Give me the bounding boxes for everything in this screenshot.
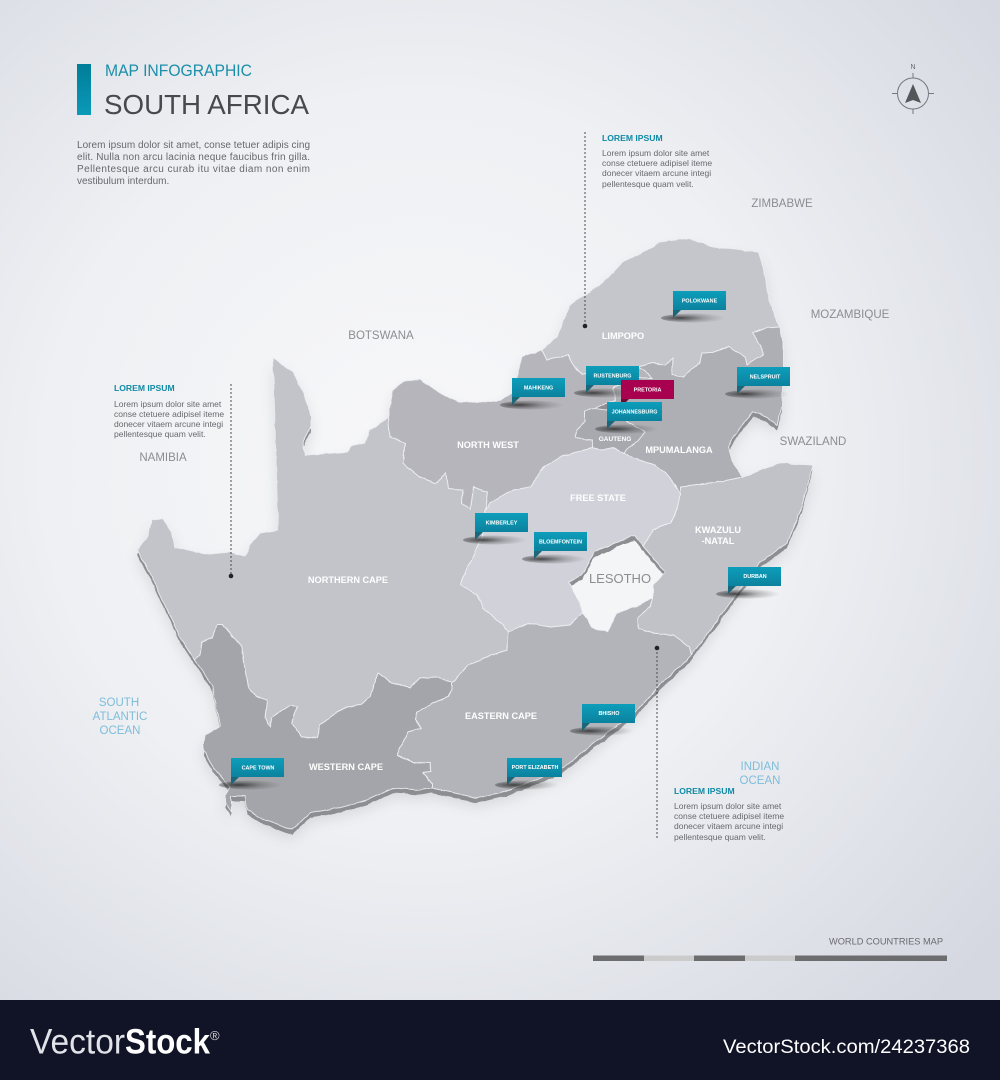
city flag: Rustenburg: RUSTENBURG bbox=[593, 374, 632, 380]
soft map glow bbox=[137, 247, 813, 839]
icon: compass: N bbox=[910, 64, 916, 71]
ocean labels: ATLANTIC bbox=[93, 711, 147, 723]
ocean labels bbox=[93, 697, 780, 787]
province: North West bbox=[388, 350, 653, 510]
callout: bottom right: Lorem ipsum dolor site amet bbox=[674, 801, 782, 811]
city flag: Kimberley bbox=[463, 513, 528, 544]
ocean labels: OCEAN bbox=[100, 725, 140, 737]
ocean labels: OCEAN bbox=[740, 775, 780, 787]
province labels: GAUTENG bbox=[599, 436, 631, 443]
city flag: Johannesburg: JOHANNESBURG bbox=[612, 410, 657, 416]
neighbouring country labels: LESOTHO bbox=[589, 571, 651, 586]
callout: top: Lorem ipsum dolor site amet bbox=[602, 148, 710, 158]
map extrusion edge bbox=[137, 243, 813, 835]
province: Northern Cape bbox=[137, 357, 508, 738]
province labels bbox=[308, 331, 741, 772]
callout: top: donecer vitaem arcune integi bbox=[602, 168, 711, 178]
footer logo: Stock bbox=[125, 1022, 210, 1062]
province: Free State bbox=[460, 447, 680, 632]
callout: left: LOREM IPSUM bbox=[114, 383, 175, 393]
ocean labels: INDIAN bbox=[741, 761, 779, 773]
intro paragraph: elit. Nulla non arcu lacinia neque faucibus frin gilla. bbox=[77, 152, 310, 163]
city flag: Bhisho: BHISHO bbox=[599, 711, 619, 717]
footer url: VectorStock.com/24237368 bbox=[723, 1036, 970, 1058]
province labels: -NATAL bbox=[702, 536, 735, 546]
province: Gauteng bbox=[575, 408, 645, 453]
city flag: Pretoria bbox=[621, 380, 674, 407]
title accent bar bbox=[77, 64, 91, 115]
city flag: Polokwane: POLOKWANE bbox=[682, 298, 718, 304]
callout: left bbox=[114, 383, 233, 578]
city flag: Port Elizabeth bbox=[495, 758, 562, 790]
neighbouring country labels: NAMIBIA bbox=[139, 452, 187, 464]
intro paragraph: vestibulum interdum. bbox=[77, 176, 169, 187]
province: KwaZulu-Natal bbox=[637, 463, 813, 655]
scale bar bbox=[593, 936, 947, 961]
province labels: LIMPOPO bbox=[602, 331, 644, 341]
intro paragraph: Lorem ipsum dolor sit amet, conse tetuer adipis cing bbox=[77, 140, 310, 151]
city flag: Bloemfontein bbox=[522, 532, 587, 564]
Lesotho bbox=[568, 536, 665, 632]
callout: left: donecer vitaem arcune integi bbox=[114, 419, 223, 429]
city flag: Cape Town bbox=[219, 758, 284, 790]
province labels: EASTERN CAPE bbox=[465, 711, 537, 721]
province labels: FREE STATE bbox=[570, 493, 626, 503]
province labels: MPUMALANGA bbox=[645, 445, 713, 455]
callout: bottom right bbox=[655, 646, 784, 842]
intro paragraph bbox=[77, 140, 310, 187]
neighbouring country labels: MOZAMBIQUE bbox=[811, 309, 890, 321]
neighbouring country labels: BOTSWANA bbox=[348, 330, 414, 342]
city flag: Rustenburg bbox=[574, 366, 639, 398]
city flag: Mahikeng bbox=[500, 378, 565, 410]
icon: compass bbox=[892, 64, 934, 114]
footer logo: ® bbox=[210, 1028, 220, 1043]
city flag: Nelspruit: NELSPRUIT bbox=[750, 374, 781, 380]
city flag: Bhisho bbox=[570, 704, 635, 736]
city flag: Kimberley: KIMBERLEY bbox=[486, 520, 518, 526]
city flag: Mahikeng: MAHIKENG bbox=[524, 386, 553, 392]
neighbouring country labels: ZIMBABWE bbox=[751, 198, 813, 210]
neighbouring country labels: SWAZILAND bbox=[780, 436, 846, 448]
callout: left: Lorem ipsum dolor site amet bbox=[114, 399, 222, 409]
city flag: Pretoria: PRETORIA bbox=[634, 388, 661, 394]
province labels: NORTHERN CAPE bbox=[308, 575, 388, 585]
city flag: Bloemfontein: BLOEMFONTEIN bbox=[539, 540, 582, 546]
province labels: WESTERN CAPE bbox=[309, 762, 383, 772]
ocean labels: SOUTH bbox=[99, 697, 139, 709]
province: Mpumalanga bbox=[607, 327, 783, 493]
city flag: Nelspruit bbox=[725, 367, 790, 398]
footer band bbox=[0, 1000, 1000, 1080]
callout: top: pellentesque quam velit. bbox=[602, 179, 694, 189]
province labels: KWAZULU bbox=[695, 525, 741, 535]
callout: top: conse ctetuere adipisel iteme bbox=[602, 158, 712, 168]
city flag: Polokwane bbox=[661, 291, 726, 322]
intro paragraph: Pellentesque arcu curab itu vitae diam non enim bbox=[77, 164, 310, 175]
map of South Africa bbox=[137, 238, 813, 835]
footer logo: Vector bbox=[30, 1022, 125, 1062]
neighbouring country labels bbox=[139, 198, 890, 586]
city flag: Port Elizabeth: PORT ELIZABETH bbox=[512, 765, 558, 771]
city flag: Cape Town: CAPE TOWN bbox=[242, 766, 275, 772]
scale bar: WORLD COUNTRIES MAP bbox=[829, 936, 943, 946]
city flag: Durban: DURBAN bbox=[743, 574, 767, 580]
title block bbox=[77, 62, 309, 120]
callout: bottom right: LOREM IPSUM bbox=[674, 786, 735, 796]
callout: bottom right: pellentesque quam velit. bbox=[674, 832, 766, 842]
province: Eastern Cape bbox=[397, 597, 692, 798]
main title: SOUTH AFRICA bbox=[104, 89, 309, 120]
callout: bottom right: conse ctetuere adipisel iteme bbox=[674, 811, 784, 821]
callout: top bbox=[583, 132, 712, 328]
callout: left: conse ctetuere adipisel iteme bbox=[114, 409, 224, 419]
footer logo bbox=[30, 1022, 220, 1062]
province labels: NORTH WEST bbox=[457, 440, 519, 450]
province: Limpopo bbox=[542, 238, 780, 377]
callout: top: LOREM IPSUM bbox=[602, 133, 663, 143]
callout: bottom right: donecer vitaem arcune integi bbox=[674, 821, 783, 831]
province: Western Cape bbox=[195, 625, 452, 830]
subtitle: MAP INFOGRAPHIC bbox=[105, 62, 252, 80]
city flag: Durban bbox=[716, 567, 781, 598]
city flag: Johannesburg bbox=[595, 402, 662, 434]
callout: left: pellentesque quam velit. bbox=[114, 429, 206, 439]
